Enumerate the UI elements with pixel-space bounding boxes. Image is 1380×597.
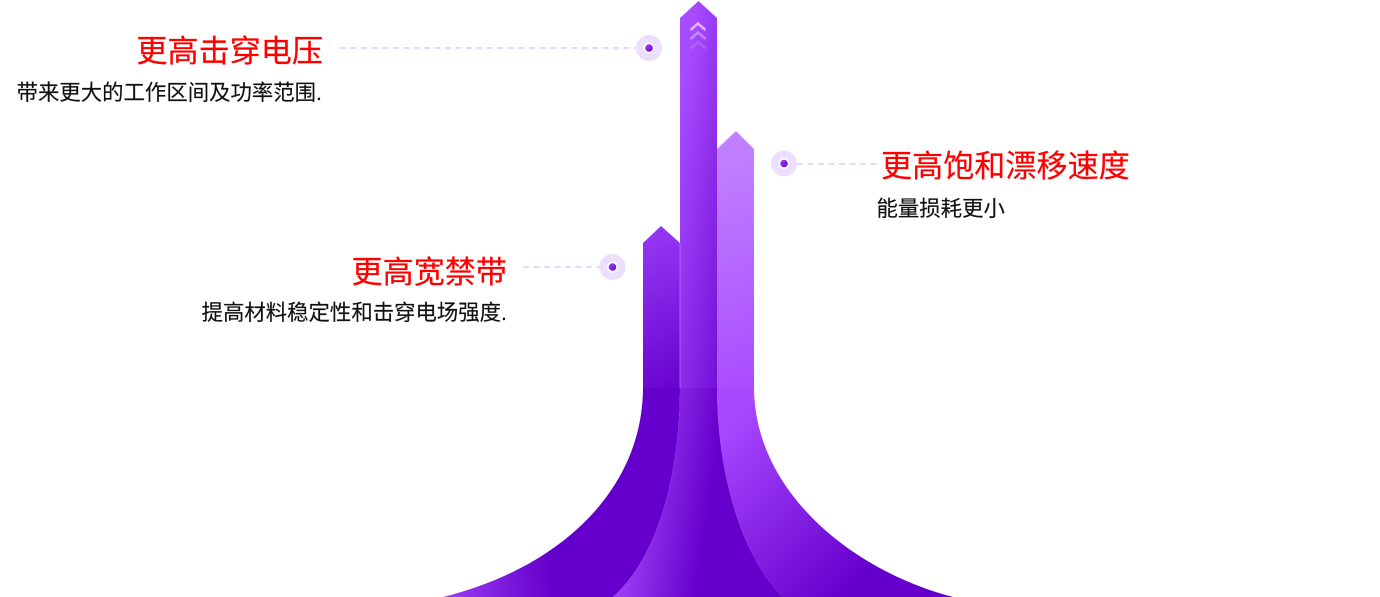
text: wide band gap description: 提高材料稳定性和击穿电场强度. — [202, 301, 507, 325]
center arrow — [613, 1, 783, 597]
connector: left — [523, 254, 626, 280]
connector: top left — [340, 35, 662, 61]
heading: wider band gap: 更高宽禁带 — [352, 255, 507, 290]
icon: chevrons — [690, 24, 706, 48]
heading: higher saturation drift velocity: 更高饱和漂移速度 — [881, 149, 1130, 184]
right arrow — [717, 131, 953, 597]
heading: higher breakdown voltage: 更高击穿电压 — [136, 34, 323, 69]
text: higher breakdown voltage description: 带来更大的工作区间及功率范围. — [17, 81, 322, 105]
connector: right — [771, 150, 877, 176]
left arrow — [443, 226, 680, 597]
text: saturation drift description: 能量损耗更小 — [876, 197, 1005, 221]
